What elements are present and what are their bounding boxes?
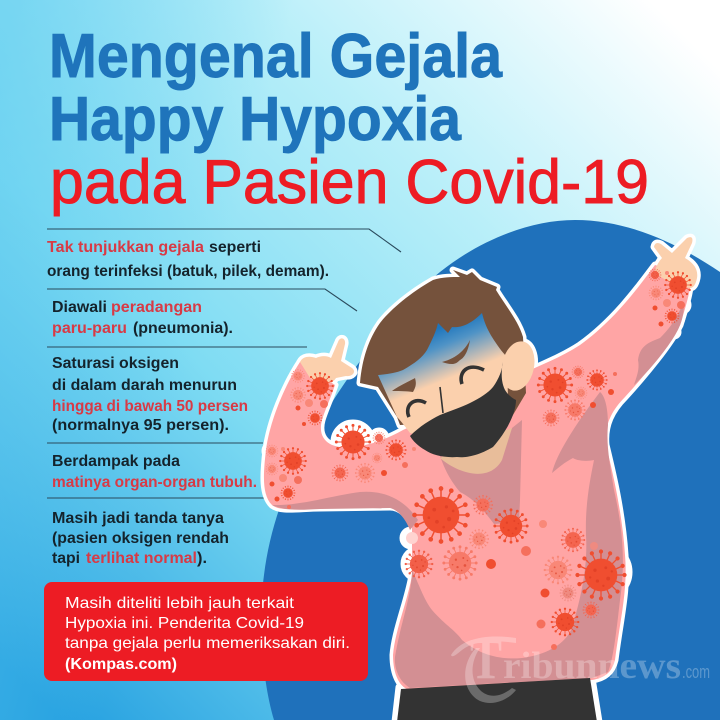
eyebrows (392, 340, 470, 392)
symptom 5 text (52, 510, 229, 567)
symptom 5 text: Masih jadi tanda tanya (52, 510, 224, 527)
ear (497, 338, 539, 394)
symptom 2 text: (pneumonia). (133, 320, 233, 337)
symptom 1 text (47, 239, 329, 280)
callout box (44, 582, 368, 681)
leader lines (47, 229, 401, 498)
watermark: T (470, 626, 502, 691)
callout box: (Kompas.com) (65, 656, 177, 673)
symptom 2 text: peradangan (111, 299, 202, 316)
symptom 4 text (52, 453, 257, 491)
symptom 2 text (52, 299, 233, 337)
watermark (451, 626, 710, 703)
symptom 3 text: Saturasi oksigen (52, 355, 179, 372)
virus cluster: left arm (266, 369, 416, 509)
figure: person with mask and virus patches (264, 237, 697, 720)
pants (397, 678, 597, 720)
white outline (264, 237, 697, 720)
shirt shading (272, 302, 684, 688)
callout box: Hypoxia ini. Penderita Covid-19 (65, 615, 304, 632)
symptom 1 text: orang terinfeksi (batuk, pilek, demam). (47, 263, 329, 280)
hands (300, 237, 697, 383)
blue backdrop shape (261, 220, 720, 720)
symptom 5 text: (pasien oksigen rendah (52, 530, 229, 547)
symptom 2 text: paru-paru (52, 320, 127, 337)
symptom 5 text: ). (197, 550, 207, 567)
symptom 3 text: (normalnya 95 persen). (52, 417, 229, 434)
watermark: ribunnews (503, 645, 681, 687)
title line 3: pada Pasien Covid-19 (50, 148, 649, 217)
eyes and nose (408, 367, 484, 417)
symptom 2 text: Diawali (52, 299, 107, 316)
callout box: tanpa gejala perlu memeriksakan diri. (65, 635, 350, 652)
virus cluster: right arm (537, 269, 692, 426)
face (378, 313, 508, 440)
symptom 1 text: seperti (209, 239, 261, 256)
callout box: Masih diteliti lebih jauh terkait (65, 595, 295, 612)
title (49, 22, 649, 217)
symptom 3 text: di dalam darah menurun (52, 377, 237, 394)
symptom 5 text: tapi (52, 550, 80, 567)
neck (440, 428, 512, 474)
symptom 1 text: Tak tunjukkan gejala (47, 239, 204, 256)
symptom 4 text: Berdampak pada (52, 453, 180, 470)
symptom 3 text (52, 355, 248, 434)
hair (360, 270, 526, 425)
title line 2: Happy Hypoxia (49, 85, 461, 154)
symptom 4 text: matinya organ-organ tubuh. (52, 474, 257, 491)
title line 1: Mengenal Gejala (49, 22, 502, 91)
watermark: .com (682, 662, 710, 682)
symptom 3 text: hingga di bawah 50 persen (52, 398, 248, 415)
mask (410, 362, 516, 457)
symptom 5 text: terlihat normal (86, 550, 197, 567)
shirt (264, 265, 691, 690)
virus cluster: torso (405, 487, 626, 650)
